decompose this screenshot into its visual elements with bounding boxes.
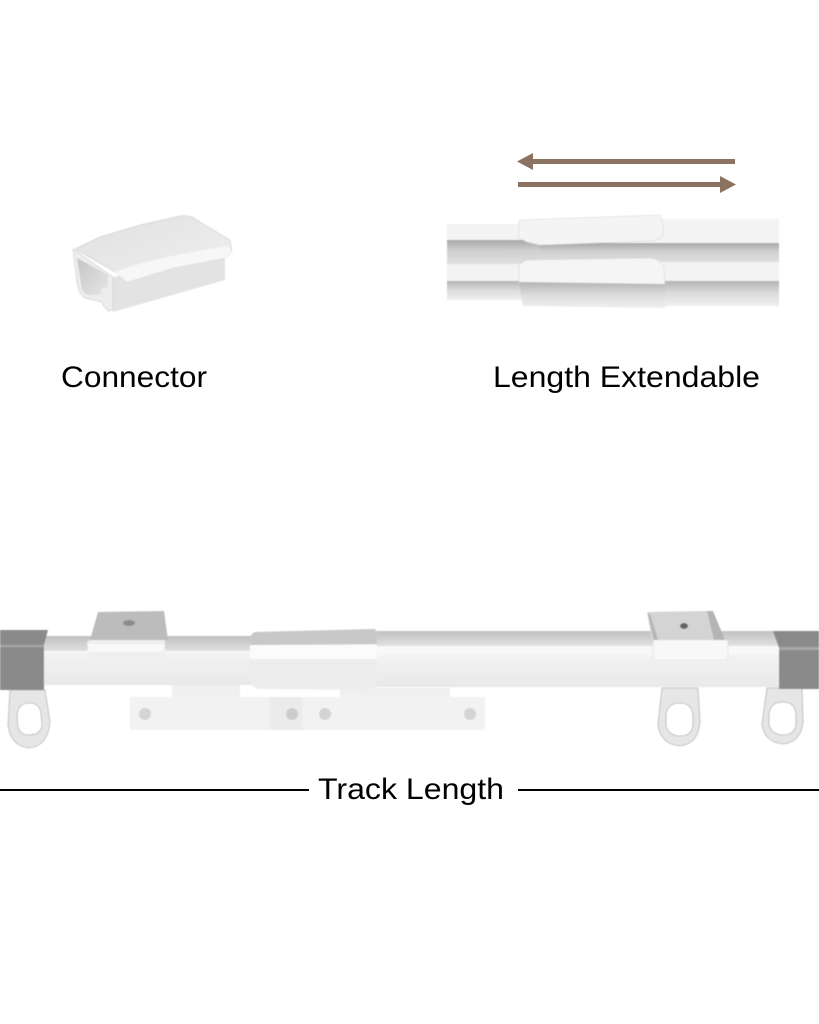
arrow: pointing left	[517, 153, 735, 170]
left end cap	[0, 630, 48, 690]
dimension line left	[0, 789, 309, 791]
right end cap	[773, 631, 819, 689]
center connector sleeve	[250, 629, 377, 690]
dimension line right	[518, 789, 819, 791]
extendable track illustration	[447, 215, 779, 308]
right rail	[375, 631, 780, 687]
bottom sleeve	[519, 258, 665, 308]
arrow: pointing right	[518, 176, 736, 193]
label: Connector: Connector	[61, 361, 207, 394]
label: Length Extendable: Length Extendable	[493, 361, 760, 394]
glider ring left	[8, 690, 50, 748]
left top clip	[87, 611, 168, 657]
label: Track Length: Track Length	[318, 773, 504, 806]
right rail section	[540, 219, 779, 306]
curtain track illustration	[0, 611, 819, 748]
wall mount bracket	[130, 685, 485, 730]
right top clip	[647, 611, 728, 660]
left rail	[44, 636, 252, 685]
top sleeve	[519, 215, 663, 245]
glider ring middle	[658, 688, 700, 746]
glider ring right	[762, 688, 803, 744]
left rail section	[447, 224, 542, 300]
icon: connector piece	[73, 216, 232, 312]
